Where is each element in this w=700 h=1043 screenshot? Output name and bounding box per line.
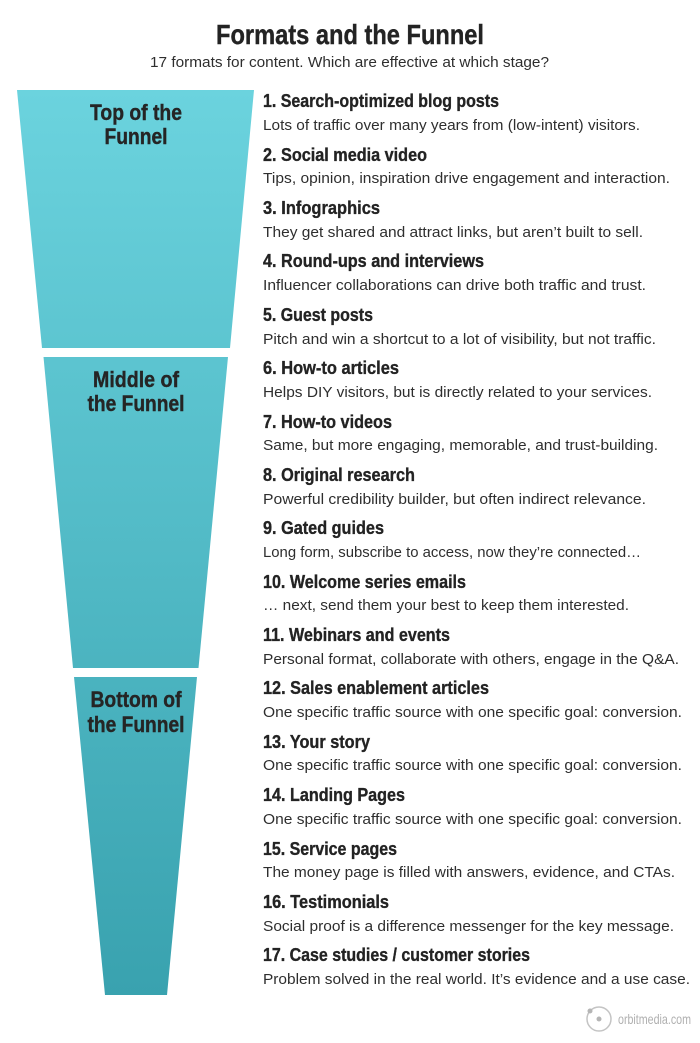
item 10: 10. Welcome series emails bbox=[263, 571, 466, 592]
item 8: Powerful credibility builder, but often indirect relevance. bbox=[263, 491, 646, 508]
item 2: Tips, opinion, inspiration drive engagement and interaction. bbox=[263, 170, 670, 187]
item 6: 6. How-to articles bbox=[263, 357, 399, 378]
panel: bottom of the funnel: Bottom of bbox=[90, 687, 182, 712]
item 12: One specific traffic source with one specific goal: conversion. bbox=[263, 704, 682, 721]
item 16: Social proof is a difference messenger for the key message. bbox=[263, 918, 674, 935]
item 3: 3. Infographics bbox=[263, 197, 380, 218]
item 8 bbox=[263, 464, 646, 508]
funnel bbox=[17, 90, 254, 995]
panel: bottom of the funnel: the Funnel bbox=[88, 712, 184, 737]
item 12: 12. Sales enablement articles bbox=[263, 677, 489, 698]
item 1: 1. Search-optimized blog posts bbox=[263, 90, 499, 111]
item 16 bbox=[263, 891, 674, 935]
item 1: Lots of traffic over many years from (low-intent) visitors. bbox=[263, 117, 640, 134]
item 17 bbox=[263, 944, 690, 988]
item 9 bbox=[263, 517, 641, 561]
item 4 bbox=[263, 250, 646, 294]
format list bbox=[263, 90, 690, 988]
item 6 bbox=[263, 357, 652, 401]
item 10: … next, send them your best to keep them interested. bbox=[263, 597, 629, 614]
item 6: Helps DIY visitors, but is directly related to your services. bbox=[263, 384, 652, 401]
item 3: They get shared and attract links, but aren’t built to sell. bbox=[263, 224, 643, 241]
panel: top of the funnel bbox=[17, 90, 254, 348]
panel: middle of the funnel: the Funnel bbox=[88, 391, 184, 416]
item 5: 5. Guest posts bbox=[263, 304, 373, 325]
title: Formats and the Funnel bbox=[216, 19, 484, 50]
item 17: Problem solved in the real world. It’s evidence and a use case. bbox=[263, 971, 690, 988]
item 16: 16. Testimonials bbox=[263, 891, 389, 912]
panel: top of the funnel: Funnel bbox=[104, 124, 168, 149]
item 15 bbox=[263, 838, 675, 881]
item 5: Pitch and win a shortcut to a lot of visibility, but not traffic. bbox=[263, 331, 656, 348]
item 11 bbox=[263, 624, 679, 668]
item 3 bbox=[263, 197, 643, 241]
item 13 bbox=[263, 731, 682, 774]
item 10 bbox=[263, 571, 629, 614]
panel: middle of the funnel bbox=[44, 357, 228, 668]
item 14: 14. Landing Pages bbox=[263, 784, 405, 805]
item 13: One specific traffic source with one specific goal: conversion. bbox=[263, 757, 682, 774]
item 4: Influencer collaborations can drive both traffic and trust. bbox=[263, 277, 646, 294]
item 8: 8. Original research bbox=[263, 464, 415, 485]
item 7 bbox=[263, 411, 658, 454]
panel: top of the funnel: Top of the bbox=[90, 100, 182, 125]
item 15: The money page is filled with answers, evidence, and CTAs. bbox=[263, 864, 675, 881]
item 9: 9. Gated guides bbox=[263, 517, 384, 538]
panel: middle of the funnel: Middle of bbox=[93, 367, 180, 392]
item 14 bbox=[263, 784, 682, 828]
panel: bottom of the funnel bbox=[74, 677, 197, 995]
logo: orbitmedia.com bbox=[587, 1007, 691, 1031]
item 12 bbox=[263, 677, 682, 721]
item 17: 17. Case studies / customer stories bbox=[263, 944, 530, 965]
item 11: Personal format, collaborate with others, engage in the Q&A. bbox=[263, 651, 679, 668]
item 9: Long form, subscribe to access, now they’re connected… bbox=[263, 544, 641, 561]
item 11: 11. Webinars and events bbox=[263, 624, 450, 645]
item 14: One specific traffic source with one specific goal: conversion. bbox=[263, 811, 682, 828]
item 7: 7. How-to videos bbox=[263, 411, 392, 432]
item 7: Same, but more engaging, memorable, and trust-building. bbox=[263, 437, 658, 454]
item 15: 15. Service pages bbox=[263, 838, 397, 859]
item 4: 4. Round-ups and interviews bbox=[263, 250, 484, 271]
item 2: 2. Social media video bbox=[263, 144, 427, 165]
item 2 bbox=[263, 144, 670, 187]
item 1 bbox=[263, 90, 640, 134]
item 5 bbox=[263, 304, 656, 348]
subtitle: 17 formats for content. Which are effective at which stage? bbox=[150, 54, 549, 71]
item 13: 13. Your story bbox=[263, 731, 371, 752]
